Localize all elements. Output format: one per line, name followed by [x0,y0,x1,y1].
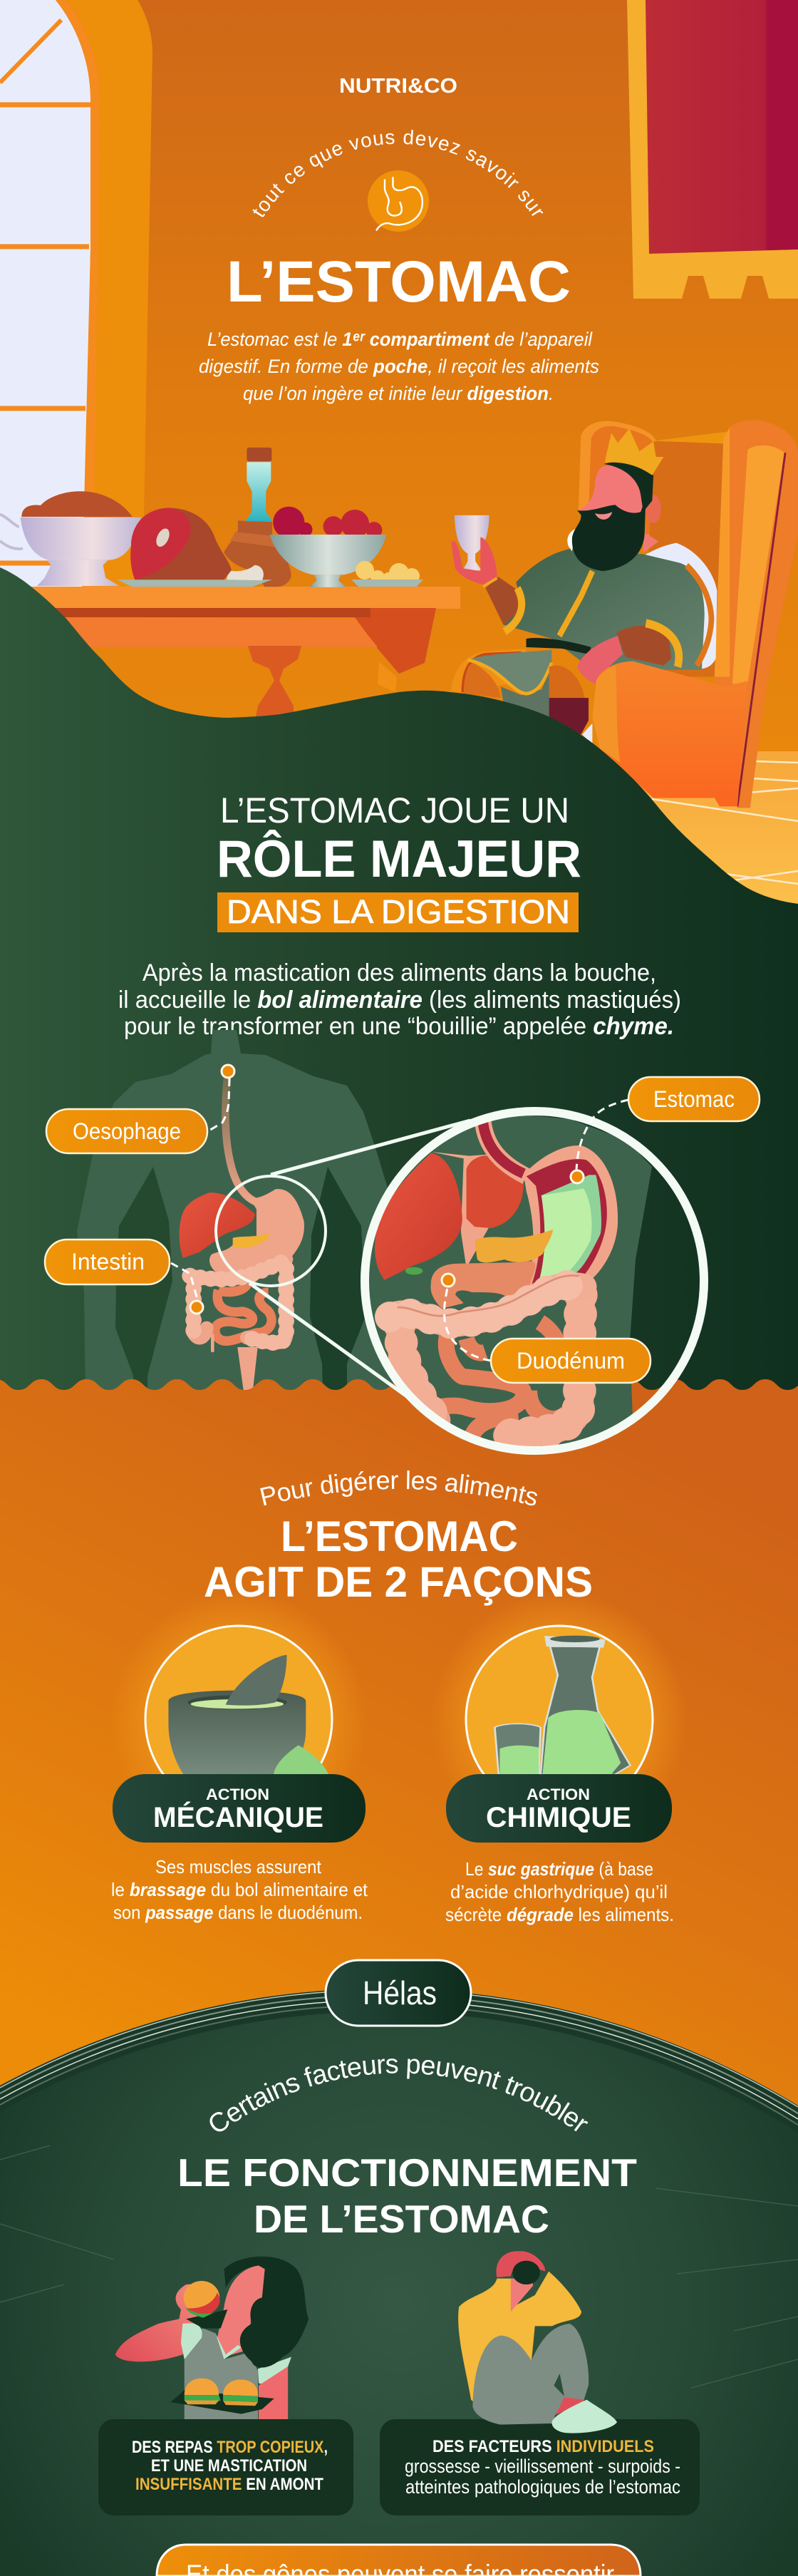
text: mecanique: le brassage du bol alimentaire et [111,1879,368,1900]
liver lobes [375,1152,524,1280]
robe [451,543,717,744]
castle window [0,0,152,592]
label: Estomac [628,1077,760,1121]
heading: le fonctionnement: DE L’ESTOMAC [254,2197,549,2241]
floor [556,751,798,922]
colon [190,1259,286,1351]
heading: role majeur: DANS LA DIGESTION [227,893,570,930]
magnified digestive system [375,1116,652,1446]
digestion paragraph [118,959,681,1040]
magnifier: small circle and connectors [216,1120,470,1411]
card: facteurs individuels: grossesse - vieillissement - surpoids - [405,2456,680,2477]
stomach cut [524,1145,618,1292]
illustration: woman eating burgers [115,2257,309,2419]
table with feast [0,448,460,720]
text: chimique: Le suc gastrique (à base [465,1858,653,1880]
heading: role majeur: RÔLE MAJEUR [217,830,581,888]
heading: agit de 2 facons [204,1513,593,1606]
card: facteurs individuels [380,2419,700,2515]
text: mecanique: son passage dans le duodénum. [113,1902,363,1923]
heading: role majeur [217,790,581,932]
oesophagus cut [483,1120,527,1176]
digestion paragraph: Après la mastication des aliments dans la bouche, [142,959,656,986]
digestion paragraph: pour le transformer en une “bouillie” appelée chyme. [124,1013,674,1040]
text: mecanique [111,1856,368,1923]
tray with burgers [170,2379,274,2414]
curved heading: pour digerer: Pour digérer les aliments [260,1470,537,1505]
heading: agit de 2 facons: AGIT DE 2 FAÇONS [204,1558,593,1606]
arms and goblet [451,515,679,686]
label: Estomac: Estomac [653,1086,735,1112]
silhouette in lens [395,1116,652,1446]
card: repas copieux: ET UNE MASTICATION [151,2456,307,2475]
heading: le fonctionnement [177,2150,637,2241]
puree plate [351,561,423,587]
intro paragraph: que l’on ingère et initie leur digestion. [243,383,554,404]
text: chimique: sécrète dégrade les aliments. [445,1904,674,1925]
action chimique card [431,1591,688,1925]
intro paragraph: digestif. En forme de poche, il reçoit les aliments [199,356,599,377]
label: Intestin [45,1240,170,1284]
action mecanique card [110,1591,368,1923]
card: repas copieux [98,2419,353,2515]
small intestine [425,1322,567,1437]
text: mecanique: Ses muscles assurent [155,1856,322,1877]
main title: L’ESTOMAC [227,249,571,314]
liver [180,1192,255,1258]
body silhouette [77,1030,399,1390]
label: Oesophage [46,1109,207,1153]
text: chimique [445,1858,674,1925]
logo NUTRI&CO: NUTRI&CO [339,75,457,98]
hero wall background [0,0,798,927]
table [0,587,460,720]
dark plate section [0,1989,798,2576]
curved heading: certains facteurs: Certains facteurs peuvent troubler [209,2059,589,2131]
text: chimique: d’acide chlorhydrique) qu’il [450,1881,668,1902]
heading: role majeur: L’ESTOMAC JOUE UN [220,790,569,830]
ham [130,508,264,580]
lens ring [365,1111,704,1451]
bottom pill callout [157,2545,641,2576]
icon: flask and beaker [494,1636,631,1774]
intro paragraph [199,329,599,404]
head [567,429,663,571]
duodenum [430,1261,536,1309]
burger in hand [184,2281,220,2318]
king on throne [451,420,798,808]
action chimique card: ACTION [527,1786,590,1803]
intro paragraph: L’estomac est le 1ᵉʳ compartiment de l’appareil [207,329,593,350]
small intestine [215,1283,271,1341]
section 3 orange background [0,1379,798,2138]
stomach [209,1189,304,1274]
card: repas copieux: DES REPAS TROP COPIEUX, [132,2438,328,2457]
label: Duodenum [491,1339,651,1383]
pill: action mecanique [113,1774,366,1843]
fruit bowl [270,507,386,587]
royal banner [627,0,798,299]
curved subtitle: tout ce que vous devez savoir sur [252,130,543,217]
label: Oesophage: Oesophage [73,1118,181,1144]
card: repas copieux: INSUFFISANTE EN AMONT [135,2475,323,2494]
action chimique card: CHIMIQUE [486,1802,631,1833]
card: facteurs individuels: DES FACTEURS INDIVIDUELS [432,2437,654,2456]
pancreas [233,1233,269,1248]
Helas pill [326,1960,471,2026]
oesophagus [225,1071,256,1202]
card: facteurs individuels: atteintes pathologiques de l’estomac [405,2476,680,2498]
icon: stomach [368,170,429,232]
icon: mortar [168,1655,328,1775]
pancreas [475,1230,553,1262]
pill: action chimique [446,1774,672,1843]
bottle and vase [224,448,291,587]
heading: le fonctionnement: LE FONCTIONNEMENT [177,2150,637,2195]
digestion paragraph: il accueille le bol alimentaire (les aliments mastiqués) [118,986,681,1014]
label: Duodenum: Duodénum [517,1348,625,1374]
illustration: man holding head [458,2251,617,2433]
action mecanique card: ACTION [206,1786,269,1803]
tureen [0,491,141,586]
action mecanique card: MÉCANIQUE [153,1801,323,1833]
label: Intestin: Intestin [71,1249,145,1274]
small digestive system [180,1071,304,1390]
throne [579,420,798,808]
rectum [237,1347,258,1390]
green wave panel [0,567,798,1397]
Helas pill: Hélas [363,1974,437,2011]
dashed leader lines and dots [171,1065,628,1361]
colon [390,1275,584,1436]
armrest [592,661,747,806]
plate [117,579,272,587]
heading: agit de 2 facons: L’ESTOMAC [281,1513,518,1560]
